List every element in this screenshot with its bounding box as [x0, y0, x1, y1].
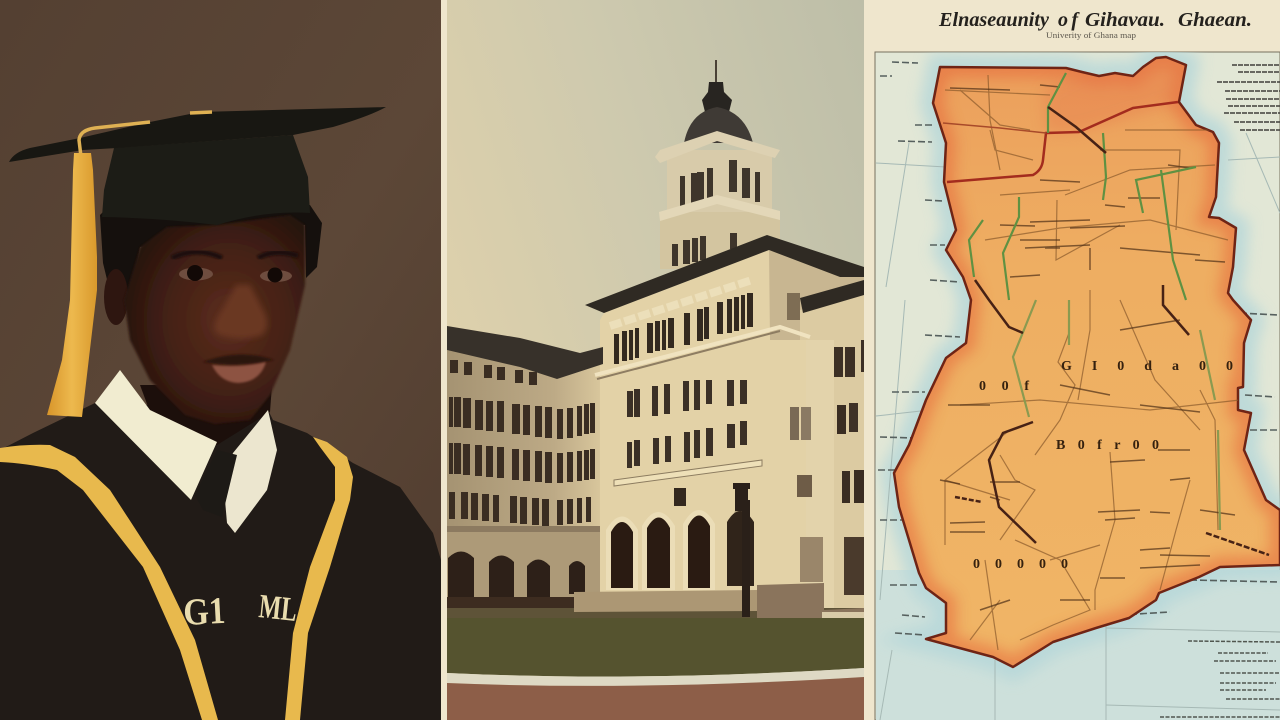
main roof [585, 235, 864, 313]
graduation gown [0, 403, 441, 720]
gown lettering: ML [257, 588, 299, 629]
southern sea [876, 570, 1280, 720]
right pier [806, 340, 834, 620]
main facade upper windows [614, 293, 753, 364]
facade string course [614, 460, 762, 486]
map title: Ghaean. [1178, 9, 1252, 31]
coast outline [894, 57, 1280, 667]
map title [938, 9, 1252, 31]
legend bottom right [1160, 641, 1280, 717]
plaque [674, 488, 686, 506]
gown yellow trim right [285, 437, 353, 720]
eyes and brows [172, 252, 298, 282]
main facade [600, 250, 800, 592]
northern region tint [1043, 60, 1190, 133]
gown yellow trim left [0, 445, 218, 720]
lamp post [727, 483, 754, 617]
legend top right [1217, 65, 1280, 130]
tower [655, 60, 780, 269]
map title: Gihavau. [1085, 9, 1165, 31]
curb [447, 668, 864, 686]
cap crown [102, 135, 310, 225]
map title: of [1058, 9, 1080, 31]
side face of main block [769, 250, 864, 340]
inner coastal shading [894, 57, 1280, 667]
short road dashes [940, 85, 1235, 610]
left wing [447, 350, 600, 526]
middle windows [627, 380, 747, 468]
left wing roof [447, 326, 603, 379]
internal boundary [943, 123, 1046, 133]
mortarboard [9, 107, 386, 162]
strip behind lawn [447, 608, 864, 620]
rivers green [969, 73, 1220, 530]
gown lettering: G1 [182, 590, 226, 634]
front steps [574, 590, 757, 612]
panel: map of Ghana [865, 0, 1280, 720]
necktie [223, 454, 237, 504]
sea annotation marks [878, 62, 1280, 635]
gown lettering [184, 594, 296, 625]
ear [104, 269, 128, 325]
decorative arch band [610, 280, 752, 326]
regional boundary [947, 102, 1178, 182]
face [124, 215, 305, 424]
left wing windows [449, 360, 595, 526]
map label 4: 0 0 0 0 0 [973, 557, 1068, 572]
road network [945, 75, 1240, 650]
map title: Elnaseaunity [938, 9, 1049, 31]
nose [214, 285, 267, 338]
coastal halo [894, 57, 1280, 667]
right plinth [757, 583, 864, 622]
white collar left [95, 370, 217, 500]
dark base band [447, 597, 574, 608]
map label 3: B 0 f r 0 0 [1056, 438, 1159, 453]
hair [100, 205, 322, 291]
Ghana landmass [894, 57, 1280, 667]
left wing arches [448, 552, 585, 598]
neck [140, 385, 272, 445]
entrance arches [606, 510, 754, 590]
tassel [47, 153, 97, 417]
lawn [447, 618, 864, 677]
panel: university building [447, 0, 866, 720]
right side windows [787, 293, 866, 595]
map subtitle: Univerity of Ghana map [1046, 31, 1136, 40]
map sea [875, 52, 1280, 720]
white collar right [223, 410, 277, 533]
dark rivers [955, 107, 1269, 555]
tassel cord [77, 110, 212, 153]
cornice band [595, 327, 810, 375]
right wing roof [800, 280, 864, 313]
panel: graduate portrait [0, 0, 441, 720]
driveway [447, 677, 864, 720]
right wing [800, 295, 864, 620]
map label 1: 0 0 f [979, 379, 1029, 394]
mouth [203, 354, 274, 383]
map label 2: G I 0 d a 0 0 [1061, 359, 1233, 374]
sea grid lines [876, 133, 1280, 720]
